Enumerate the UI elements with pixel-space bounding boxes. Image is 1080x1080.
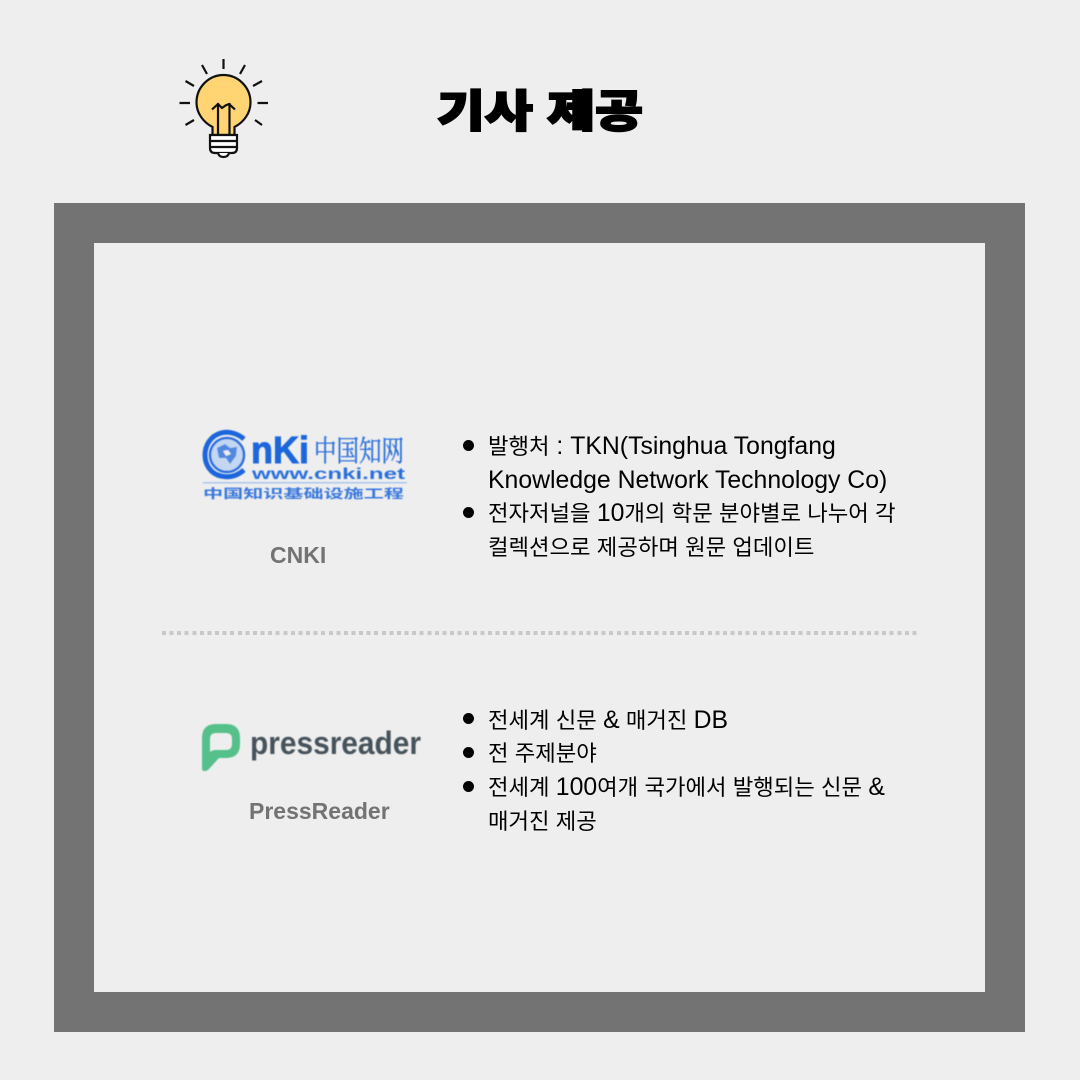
- logo: CNKI: 中国知网: [314, 429, 404, 470]
- bullet 1: [463, 440, 474, 451]
- text: publisher line 1: 발행처 : TKN(Tsinghua Tongfang: [488, 429, 836, 461]
- label: PressReader: PressReader: [249, 798, 390, 824]
- dotted divider: [162, 631, 917, 635]
- label: CNKI: CNKI: [270, 542, 326, 568]
- panel: frame: [54, 203, 1025, 1032]
- text: newspapers DB: 전세계 신문 & 매거진 DB: [488, 703, 728, 735]
- text: journals line 1: 전자저널을 10개의 학문 분야별로 나누어 각: [488, 496, 896, 528]
- icon: light bulb: [180, 59, 268, 158]
- text: all subjects: 전 주제분야: [488, 736, 597, 768]
- logo: CNKI: 中国知识基础设施工程: [203, 483, 404, 502]
- title: 기사 제공: [437, 76, 643, 140]
- logo: CNKI: nKi: [251, 430, 309, 472]
- logo: CNKI: www.cnki.net: [250, 466, 405, 483]
- bullet 4: [463, 747, 474, 758]
- text: countries line 1: 전세계 100여개 국가에서 발행되는 신문 &: [488, 770, 885, 802]
- bullet 5: [463, 781, 474, 792]
- logo: PressReader: [201, 723, 422, 772]
- bullet 3: [463, 713, 474, 724]
- text: countries line 2: 매거진 제공: [488, 804, 597, 836]
- bullet 2: [463, 507, 474, 518]
- text: journals line 2: 컬렉션으로 제공하며 원문 업데이트: [488, 530, 814, 562]
- logo: PressReader: pressreader: [250, 725, 421, 761]
- text: publisher line 2: Knowledge Network Technology Co): [488, 467, 887, 494]
- logo: CNKI: [202, 429, 408, 502]
